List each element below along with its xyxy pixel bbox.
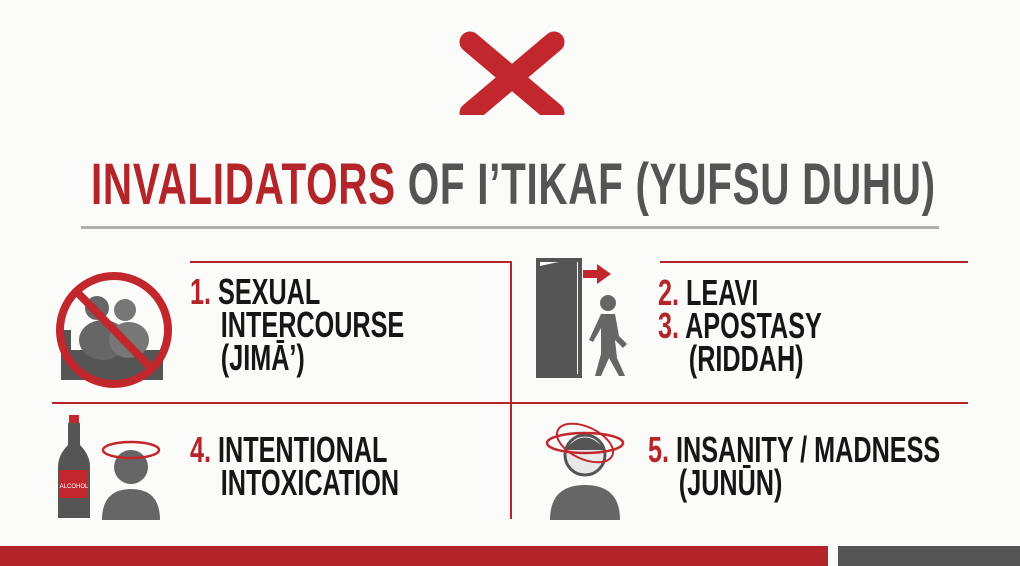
panel 2: leaving / apostasy bbox=[536, 258, 822, 379]
icon: bottle and dizzy person: ALCOHOL bbox=[60, 484, 89, 490]
text: 4. INTENTIONAL bbox=[190, 429, 387, 470]
text bbox=[190, 429, 399, 503]
panel 1: sexual intercourse bbox=[56, 271, 404, 388]
text: 1. SEXUAL bbox=[190, 271, 320, 312]
text: 5. INSANITY / MADNESS bbox=[648, 429, 940, 470]
icon: door and walker bbox=[536, 258, 627, 378]
icon: big red X bbox=[460, 32, 564, 115]
panel 5: insanity bbox=[546, 422, 940, 520]
text: (RIDDAH) bbox=[689, 338, 804, 379]
panel 4: intoxication bbox=[58, 415, 399, 520]
text: INTERCOURSE bbox=[221, 304, 404, 345]
text: 2. LEAVI bbox=[658, 272, 758, 313]
icon: bottle and dizzy person bbox=[58, 415, 160, 520]
icon: prohibited bed bbox=[56, 272, 172, 388]
text: (JIMĀ’) bbox=[221, 337, 305, 378]
footer bars bbox=[0, 546, 1020, 566]
icon: dizzy head bbox=[546, 422, 624, 520]
text: INTOXICATION bbox=[221, 462, 399, 503]
text bbox=[658, 272, 822, 379]
title: INVALIDATORS OF I’TIKAF (YUFSU DUHU) bbox=[91, 152, 936, 217]
text: (JUNŪN) bbox=[679, 462, 782, 503]
text bbox=[648, 429, 940, 503]
text bbox=[190, 271, 404, 378]
text: 3. APOSTASY bbox=[658, 305, 822, 346]
